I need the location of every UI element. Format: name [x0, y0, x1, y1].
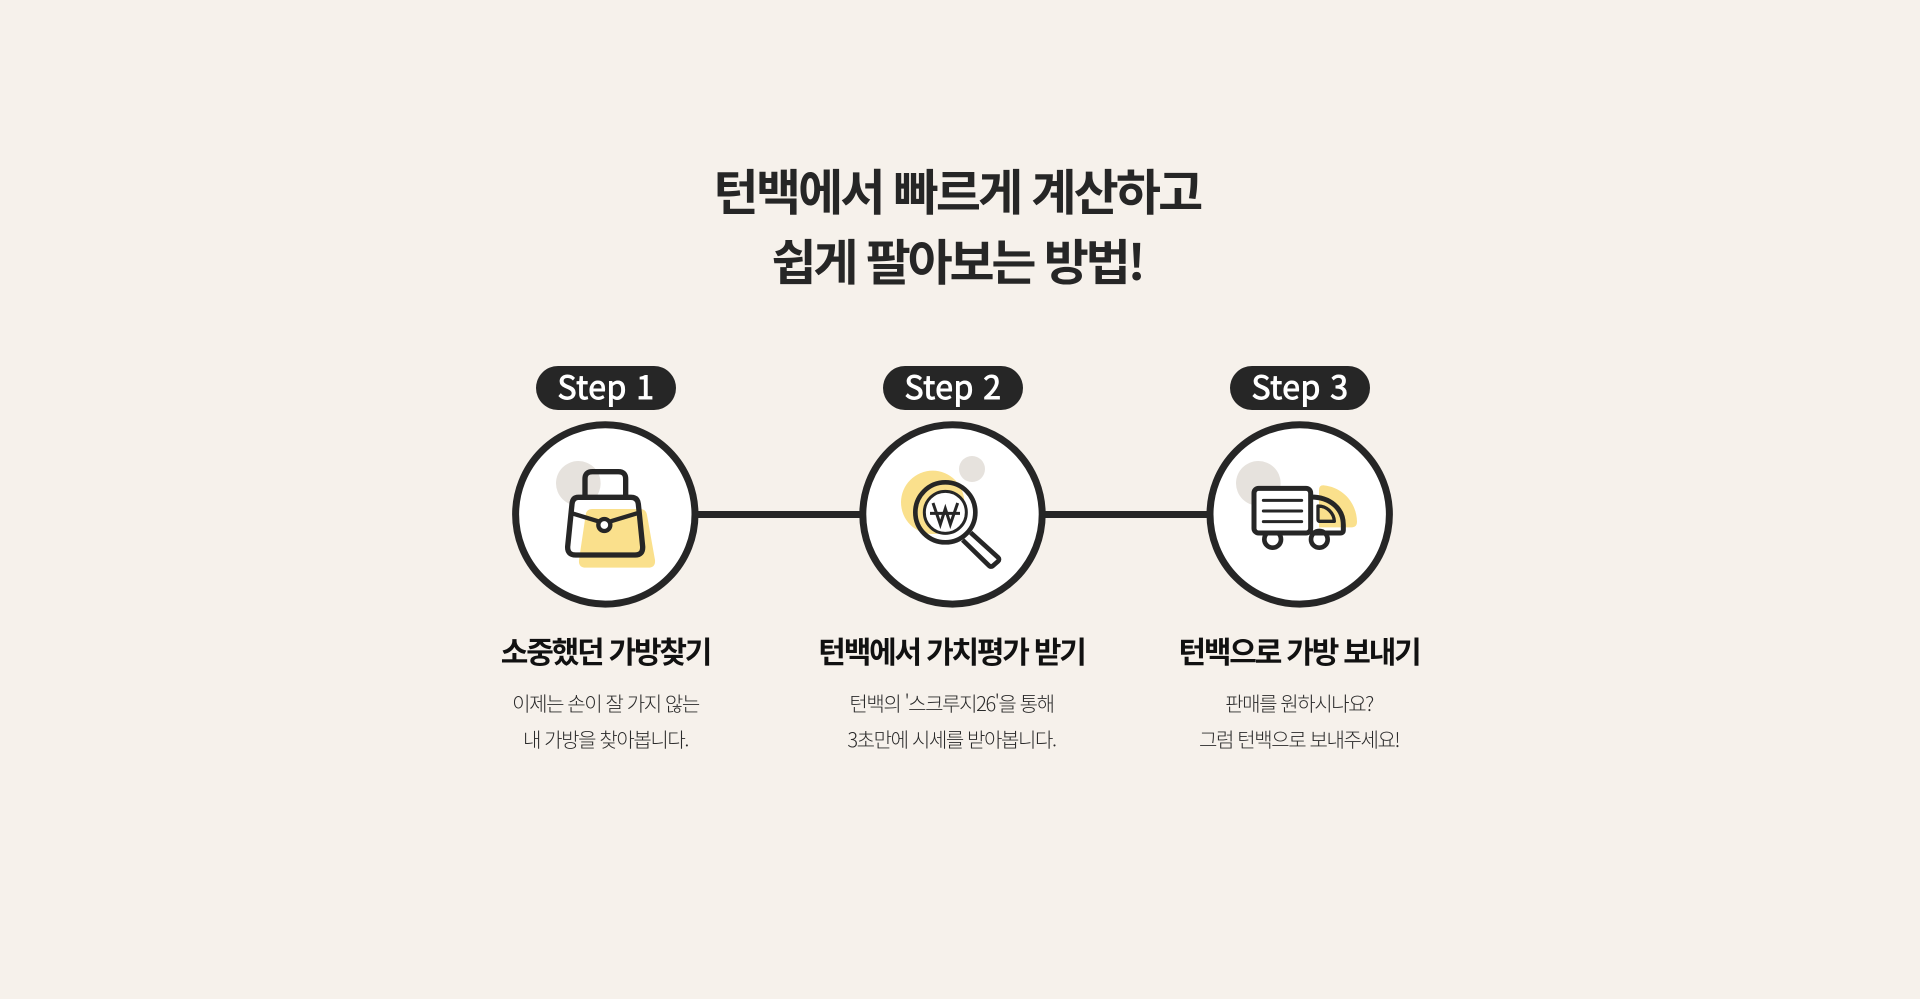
step 1 badge [536, 366, 676, 410]
circle: step 1 [516, 425, 695, 604]
connector: step 1 to step 2 [695, 511, 863, 518]
text: step 3 description: 판매를 원하시나요? [1225, 688, 1373, 717]
step 3 badge: Step 3 [1251, 363, 1349, 409]
text: step 3 description [1199, 688, 1399, 753]
step 2 badge: Step 2 [904, 363, 1002, 409]
heading: step 1: 소중했던 가방찾기 [501, 628, 710, 672]
step 2 badge [883, 366, 1023, 410]
text: step 1 description [512, 688, 700, 753]
title: 쉽게 팔아보는 방법! [771, 224, 1143, 295]
text: step 2 description: 3초만에 시세를 받아봅니다. [847, 724, 1056, 753]
icon: handbag [556, 461, 655, 568]
text: step 1 description: 내 가방을 찾아봅니다. [523, 724, 688, 753]
heading: step 3: 턴백으로 가방 보내기 [1178, 628, 1420, 672]
circle: step 2 [863, 425, 1042, 604]
icon: delivery truck [1236, 461, 1357, 548]
title [714, 154, 1202, 295]
text: step 2 description [847, 688, 1056, 753]
step 1 badge: Step 1 [557, 363, 655, 409]
circle: step 3 [1210, 425, 1389, 604]
step 3 badge [1230, 366, 1370, 410]
text: step 1 description: 이제는 손이 잘 가지 않는 [512, 688, 699, 717]
text: step 2 description: 턴백의 '스크루지26'을 통해 [849, 688, 1054, 717]
title: 턴백에서 빠르게 계산하고 [714, 154, 1200, 225]
connector: step 2 to step 3 [1042, 511, 1210, 518]
heading: step 2: 턴백에서 가치평가 받기 [818, 628, 1085, 672]
text: step 3 description: 그럼 턴백으로 보내주세요! [1199, 724, 1399, 753]
icon: magnifier with won sign [901, 456, 999, 567]
